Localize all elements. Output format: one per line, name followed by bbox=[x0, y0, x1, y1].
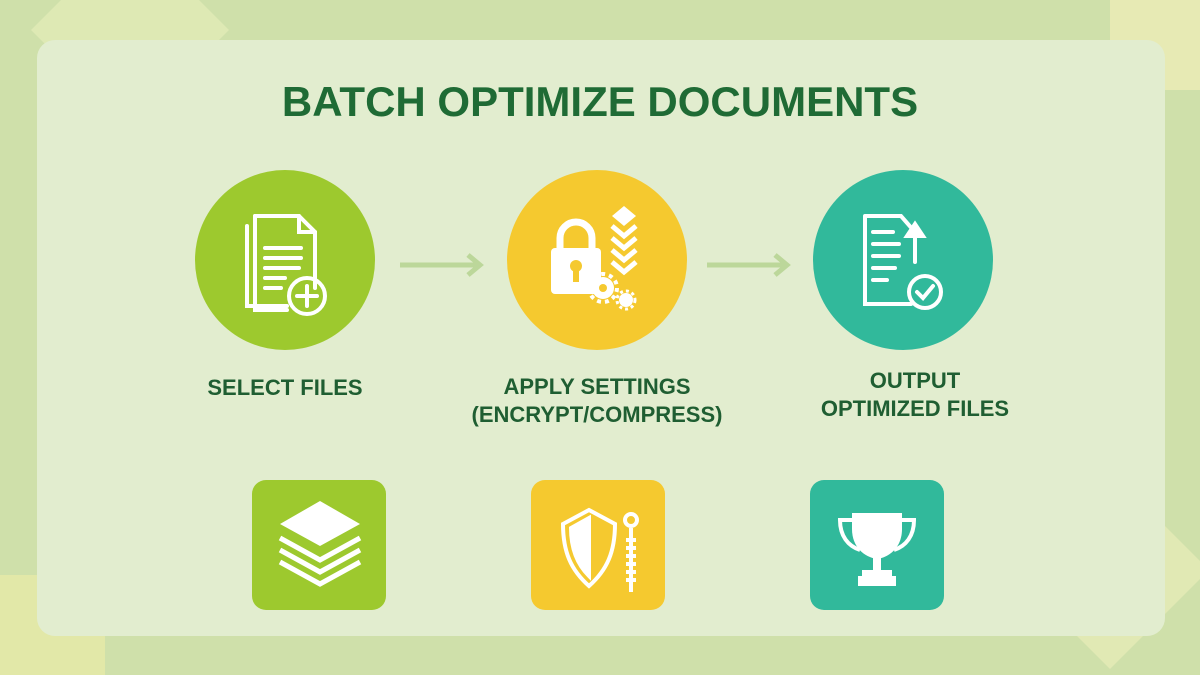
icon: document plus bbox=[245, 214, 327, 316]
icon: lock layers gears bbox=[551, 206, 638, 310]
label 3: OUTPUT bbox=[870, 368, 960, 393]
tile 1: layers bbox=[252, 480, 386, 610]
label 3: OPTIMIZED FILES bbox=[821, 396, 1009, 421]
step 3 circle: output bbox=[813, 170, 993, 350]
arrow 2 bbox=[707, 253, 791, 277]
tile 3: trophy bbox=[810, 480, 944, 610]
icon: document check upload bbox=[863, 214, 943, 310]
step 2 circle: apply settings bbox=[507, 170, 687, 350]
label 3 bbox=[821, 368, 1009, 421]
tile 2: shield zipper bbox=[531, 480, 665, 610]
label 2: (ENCRYPT/COMPRESS) bbox=[472, 402, 722, 427]
title: BATCH OPTIMIZE DOCUMENTS bbox=[282, 78, 918, 125]
label 1: SELECT FILES bbox=[207, 375, 363, 400]
label 2 bbox=[472, 374, 722, 427]
label 2: APPLY SETTINGS bbox=[503, 374, 691, 399]
arrow 1 bbox=[400, 253, 484, 277]
step 1 circle: select files bbox=[195, 170, 375, 350]
